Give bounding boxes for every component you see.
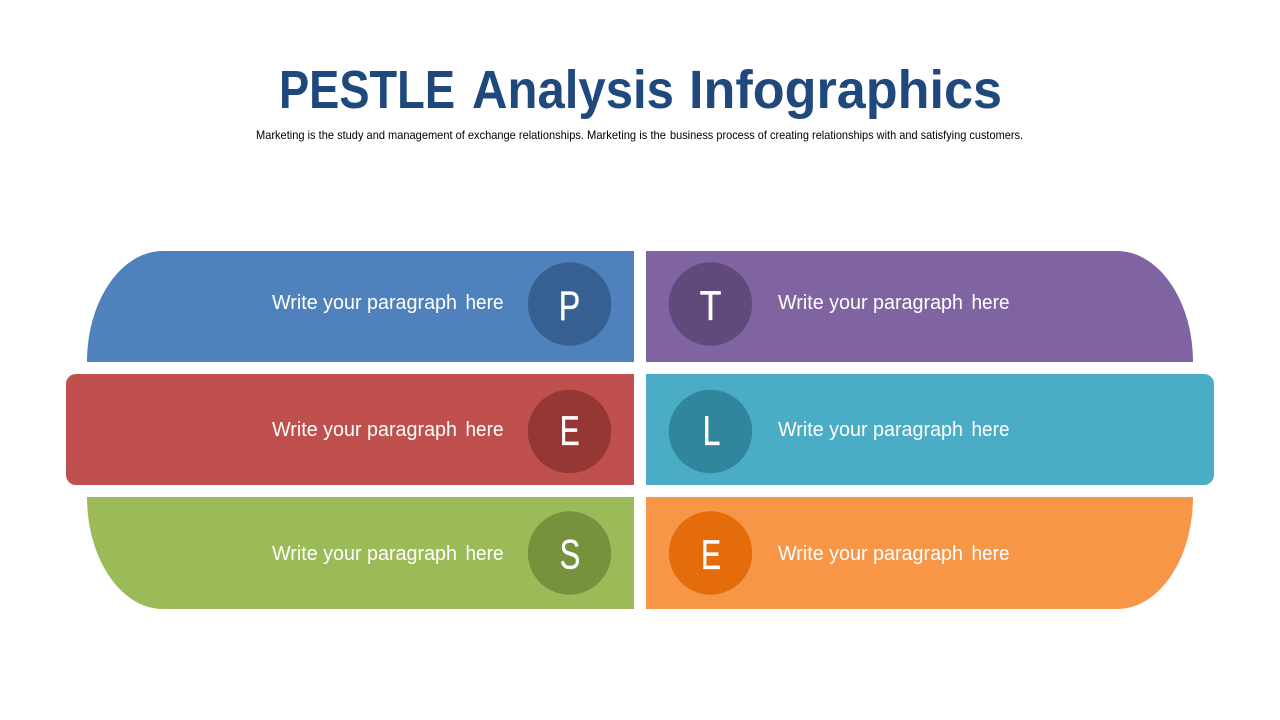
text: E2 paragraph: Write your paragraph: [778, 543, 963, 565]
icon: L badge: L: [702, 407, 720, 454]
text: P paragraph: here: [466, 292, 504, 314]
icon: E2 badge: E: [701, 531, 721, 578]
title: Infographics: [689, 60, 1002, 120]
icon: S badge: S: [560, 530, 580, 578]
icon: L badge: [669, 390, 752, 473]
icon: P badge: [528, 262, 611, 346]
icon: E badge: [528, 390, 611, 473]
icon: S badge: [528, 511, 611, 595]
text: E2 paragraph: here: [972, 543, 1010, 565]
text: S paragraph: Write your paragraph: [272, 543, 457, 565]
text: T paragraph: Write your paragraph: [778, 292, 963, 314]
title: Analysis: [472, 60, 674, 120]
subtitle: business process of creating relationships with and satisfying customers.: [670, 128, 1023, 142]
icon: E2 badge: [669, 511, 752, 595]
panel: P: [87, 251, 634, 362]
subtitle: [256, 128, 1023, 142]
text: L paragraph: Write your paragraph: [778, 419, 963, 441]
text: E paragraph: Write your paragraph: [272, 419, 457, 441]
title: PESTLE: [279, 60, 455, 120]
subtitle: Marketing is the study and management of exchange relationships.: [256, 128, 584, 142]
panel: E (orange): [646, 497, 1193, 609]
icon: T badge: [669, 262, 752, 346]
text: L paragraph: here: [972, 419, 1010, 441]
icon: T badge: T: [700, 282, 721, 329]
panel: T: [646, 251, 1193, 362]
icon: P badge: P: [559, 282, 580, 329]
text: S paragraph: here: [466, 543, 504, 565]
icon: E badge: E: [560, 407, 580, 454]
subtitle: Marketing is the: [587, 128, 666, 142]
text: E paragraph: here: [466, 419, 504, 441]
title: [279, 60, 1002, 120]
text: P paragraph: Write your paragraph: [272, 292, 457, 314]
panel: L: [646, 374, 1214, 485]
text: T paragraph: here: [972, 292, 1010, 314]
panel: S: [87, 497, 634, 609]
panel: E (red): [66, 374, 634, 485]
